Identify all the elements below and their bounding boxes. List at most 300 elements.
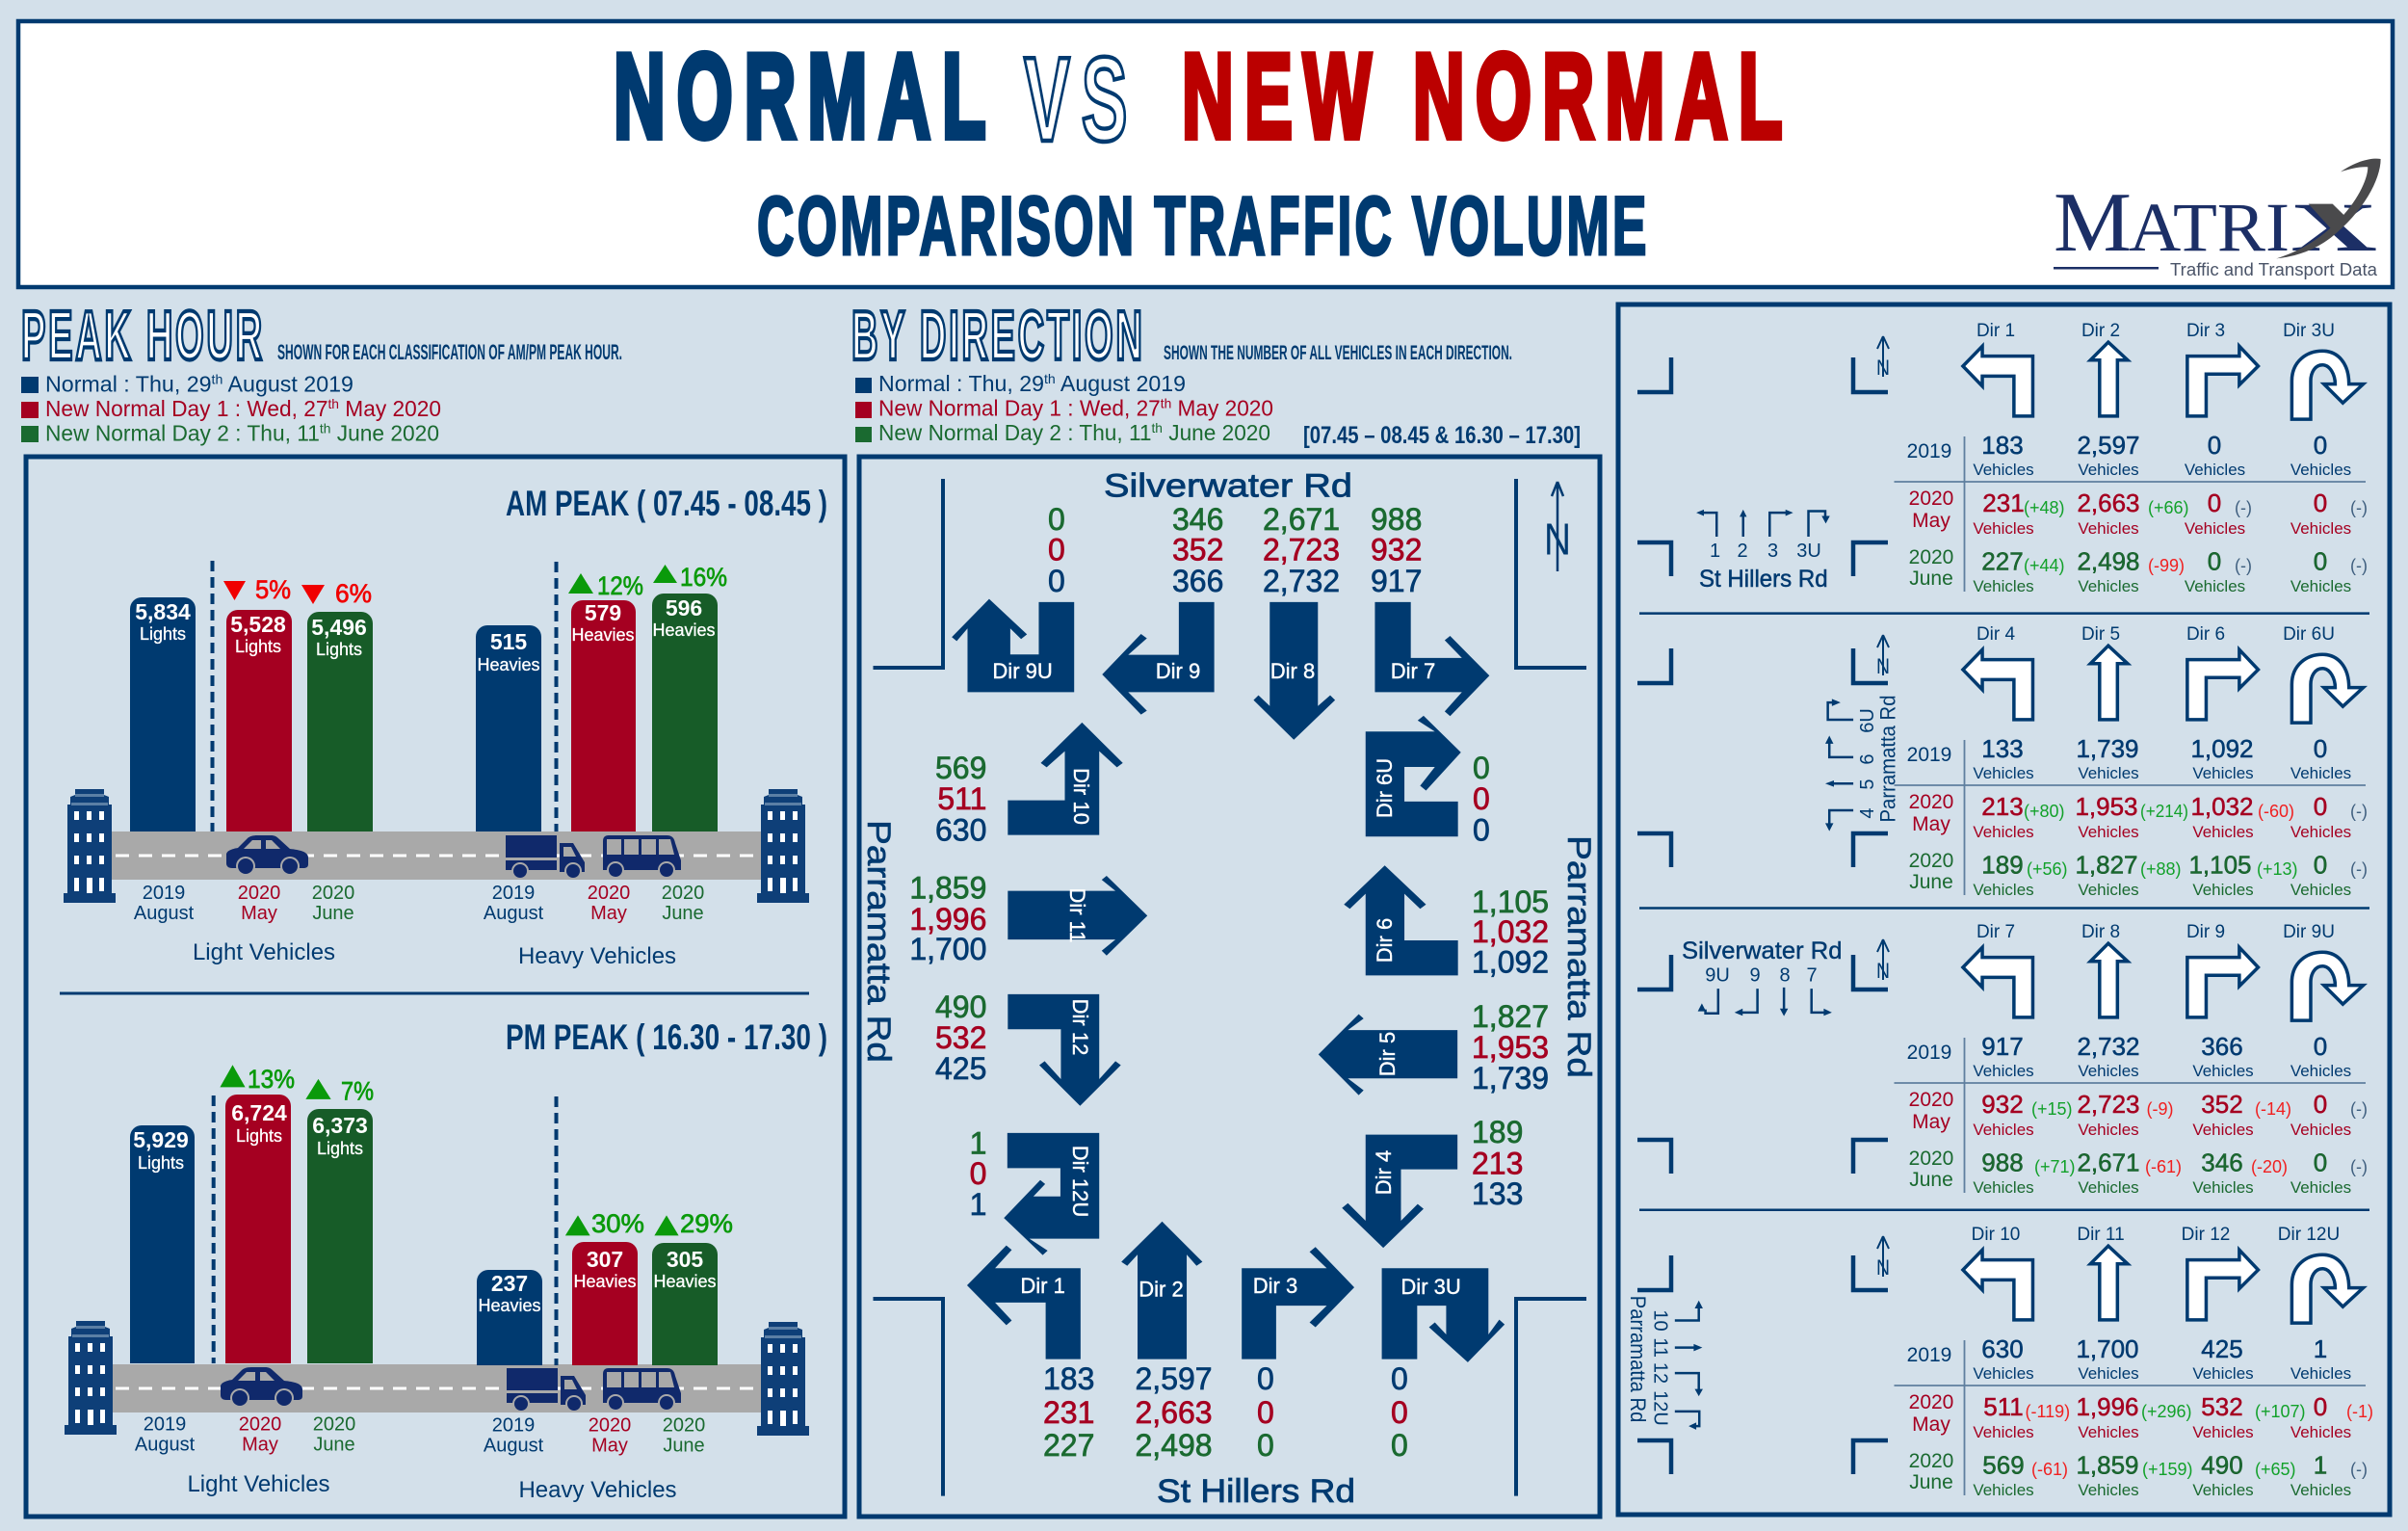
- counts: parramatta rd east: [1472, 751, 1549, 1211]
- table: dir 1 to 3u: 0: [2314, 488, 2327, 517]
- am peak heading: AM PEAK ( 07.45 - 08.45 ): [506, 484, 827, 523]
- legend: peak hour: August 2019: [222, 372, 353, 397]
- table: dir 7 to 9u: June: [1909, 1169, 1953, 1191]
- table: dir 7 to 9u: 2020: [1909, 1089, 1953, 1111]
- axis labels am: May: [241, 903, 277, 924]
- inset map: parramatta rd east: 4: [1857, 807, 1878, 819]
- bar chart: am heavy vehicles: 515: [490, 629, 527, 654]
- percent changes am: 5%: [255, 575, 291, 604]
- counts: silverwater rd: 0: [1048, 502, 1065, 537]
- table: dir 4 to 6u: Vehicles: [1973, 881, 2034, 899]
- table: dir 4 to 6u: Vehicles: [2078, 823, 2139, 841]
- counts: parramatta rd east: 1,739: [1472, 1061, 1549, 1095]
- legend: by direction: June 2020: [1163, 420, 1270, 445]
- table: dir 7 to 9u: Vehicles: [2290, 1062, 2351, 1080]
- bar chart: pm heavy vehicles: Heavies: [573, 1272, 637, 1291]
- dividers pm: [214, 1095, 556, 1365]
- table: dir 10 to 12u: June: [1909, 1471, 1953, 1493]
- axis labels am: [134, 883, 704, 969]
- bar chart: am light vehicles: Lights: [140, 624, 186, 644]
- table: dir 10 to 12u: Vehicles: [2078, 1364, 2139, 1383]
- table: dir 7 to 9u: Vehicles: [2192, 1062, 2254, 1080]
- axis labels pm: 2020: [589, 1414, 631, 1436]
- direction labels on arrows: Dir 2: [1139, 1278, 1184, 1302]
- table: dir 10 to 12u: Vehicles: [2078, 1423, 2139, 1441]
- icon: buildings am: [64, 789, 809, 903]
- table: dir 4 to 6u: 0: [2314, 734, 2327, 763]
- table: dir 1 to 3u: Vehicles: [2290, 519, 2351, 538]
- table: dir 10 to 12u: 2020: [1909, 1391, 1953, 1413]
- table: dir 1 to 3u: (-): [2235, 498, 2252, 517]
- table: dir 10 to 12u: 630: [1981, 1334, 2024, 1363]
- counts: silverwater rd: 346: [1172, 502, 1223, 537]
- table: dir 10 to 12u: (+65): [2255, 1460, 2296, 1479]
- table: dir 1 to 3u: 2,597: [2077, 431, 2140, 460]
- table: dir 4 to 6u: (+80): [2024, 802, 2065, 821]
- legend: by direction: New Normal Day 1 : Wed, 27: [878, 395, 1165, 420]
- inset map: st hillers rd: 3U: [1796, 541, 1821, 562]
- table: dir 10 to 12u: 1: [2314, 1451, 2327, 1480]
- bar chart: pm light vehicles: Lights: [236, 1126, 282, 1146]
- counts: silverwater rd: 917: [1371, 564, 1422, 598]
- bar chart: am heavy vehicles: [476, 594, 718, 831]
- panel: peak hour charts: [26, 457, 845, 1517]
- table: dir 4 to 6u: Vehicles: [2290, 823, 2351, 841]
- table: dir 4 to 6u: Vehicles: [2078, 881, 2139, 899]
- legend: by direction: th: [1151, 420, 1163, 436]
- direction labels on arrows: Dir 12U: [1068, 1146, 1092, 1217]
- table: dir 4 to 6u: (+56): [2027, 859, 2068, 879]
- counts: st hillers rd: 0: [1391, 1428, 1408, 1463]
- icon: vehicles pm: [221, 1367, 681, 1412]
- logo: matrix: ATRI: [2129, 189, 2290, 266]
- bar chart: pm light vehicles: 6,724: [231, 1100, 287, 1125]
- table: dir 10 to 12u: Vehicles: [2078, 1481, 2139, 1499]
- legend: by direction: th: [1161, 395, 1171, 410]
- table: dir 10 to 12u: Dir 10: [1972, 1225, 2020, 1245]
- table: dir 10 to 12u: 532: [2201, 1392, 2243, 1421]
- direction labels on arrows: Dir 8: [1270, 659, 1315, 683]
- axis labels pm: August: [484, 1436, 544, 1457]
- counts: parramatta rd west: 1: [970, 1187, 986, 1222]
- bar chart: pm light vehicles: Lights: [317, 1139, 363, 1158]
- table: dir 7 to 9u: Vehicles: [1973, 1178, 2034, 1197]
- inset map: parramatta rd west: 12: [1650, 1362, 1671, 1384]
- title: normal vs new normal: VS: [1024, 34, 1139, 167]
- axis labels pm: 2019: [492, 1414, 535, 1436]
- section: parramatta rd west directions: [1626, 1225, 2373, 1499]
- table: dir 4 to 6u: (+214): [2140, 802, 2188, 821]
- table: dir 1 to 3u: (-99): [2148, 556, 2185, 575]
- table: dir 7 to 9u: Dir 9U: [2283, 922, 2335, 942]
- table: dir 10 to 12u: 1: [2314, 1334, 2327, 1363]
- percent changes pm: 30%: [591, 1209, 644, 1238]
- direction labels on arrows: Dir 1: [1020, 1274, 1065, 1298]
- panel: intersection diagram: [859, 457, 1600, 1517]
- table: dir 10 to 12u: (+296): [2141, 1402, 2192, 1421]
- percent changes am: 16%: [680, 563, 727, 592]
- axis labels pm: 2019: [144, 1414, 186, 1436]
- table: dir 1 to 3u: 2020: [1909, 546, 1953, 568]
- table: dir 10 to 12u: 0: [2314, 1392, 2327, 1421]
- table: dir 7 to 9u: 932: [1981, 1090, 2024, 1119]
- table: dir 7 to 9u: 2,671: [2077, 1148, 2140, 1177]
- inset map: parramatta rd west: Parramatta Rd: [1626, 1296, 1650, 1422]
- table: dir 4 to 6u: (-): [2350, 859, 2368, 879]
- table: dir 7 to 9u: Dir 8: [2081, 922, 2120, 942]
- table: dir 4 to 6u: (-60): [2258, 802, 2294, 821]
- counts: parramatta rd west: 0: [970, 1156, 986, 1191]
- axis labels pm: Light Vehicles: [187, 1471, 330, 1497]
- counts: parramatta rd east: 189: [1472, 1115, 1523, 1149]
- bar chart: pm heavy vehicles: 305: [667, 1247, 703, 1272]
- icon: buildings pm: [65, 1321, 809, 1436]
- axis labels am: June: [312, 903, 354, 924]
- table: dir 7 to 9u: (+15): [2031, 1099, 2073, 1119]
- table: dir 4 to 6u: Vehicles: [2290, 764, 2351, 782]
- axis labels pm: 2020: [313, 1414, 355, 1436]
- table: dir 4 to 6u: 2019: [1907, 744, 1951, 766]
- counts: parramatta rd east: 0: [1473, 751, 1490, 785]
- table: dir 7 to 9u: (+71): [2034, 1157, 2076, 1176]
- counts: st hillers rd: 0: [1391, 1395, 1408, 1430]
- table: dir 4 to 6u: 1,953: [2075, 792, 2138, 821]
- table: dir 1 to 3u: Dir 3: [2186, 321, 2225, 341]
- table: dir 7 to 9u: Vehicles: [1973, 1121, 2034, 1139]
- road: pm: [112, 1364, 762, 1412]
- inset map: silverwater rd: 8: [1779, 965, 1791, 987]
- road corners: [873, 479, 1586, 1496]
- inset map: parramatta rd east: Parramatta Rd: [1876, 696, 1899, 823]
- axis labels pm: Heavy Vehicles: [518, 1477, 677, 1503]
- table: dir 1 to 3u: 183: [1981, 431, 2024, 460]
- table: dir 10 to 12u: 425: [2201, 1334, 2243, 1363]
- counts: st hillers rd: 183: [1043, 1361, 1094, 1396]
- section: parramatta rd east directions: [1637, 624, 2368, 899]
- percent changes am: 6%: [335, 579, 372, 608]
- direction labels on arrows: Dir 6U: [1373, 758, 1397, 818]
- heading: by direction: BY DIRECTION: [851, 298, 1145, 375]
- table: dir 7 to 9u: Vehicles: [2078, 1121, 2139, 1139]
- counts: silverwater rd: 0: [1048, 533, 1065, 568]
- counts: st hillers rd: [1043, 1361, 1408, 1463]
- counts: st hillers rd: 2,597: [1135, 1361, 1213, 1396]
- table: dir 4 to 6u: 1,105: [2188, 850, 2252, 879]
- table: dir 7 to 9u: 2020: [1909, 1148, 1953, 1170]
- axis labels pm: [135, 1414, 705, 1503]
- table: dir 1 to 3u: Vehicles: [2290, 461, 2351, 479]
- arrows: east west south approaches: [967, 865, 1505, 1362]
- legend: by direction: th: [1044, 371, 1056, 386]
- table: dir 10 to 12u: (+107): [2255, 1402, 2306, 1421]
- table: dir 10 to 12u: Dir 12U: [2278, 1225, 2340, 1245]
- legend: by direction: August 2019: [1056, 371, 1186, 396]
- direction labels on arrows: Dir 3: [1253, 1274, 1297, 1298]
- counts: st hillers rd: 0: [1257, 1361, 1274, 1396]
- counts: parramatta rd west: 532: [935, 1020, 986, 1055]
- counts: st hillers rd: 0: [1257, 1395, 1274, 1430]
- table: dir 7 to 9u: 988: [1981, 1148, 2024, 1177]
- table: dir 4 to 6u: 1,827: [2075, 850, 2138, 879]
- counts: parramatta rd east: 1,092: [1472, 944, 1549, 979]
- table: dir 10 to 12u: 511: [1983, 1392, 2024, 1421]
- road name: parramatta rd west: Parramatta Rd: [860, 820, 897, 1063]
- table: dir 1 to 3u: (-): [2350, 556, 2368, 575]
- table: dir 1 to 3u: 0: [2208, 431, 2221, 460]
- table: dir 7 to 9u: 346: [2201, 1148, 2243, 1177]
- inset map: parramatta rd east: 6U: [1857, 708, 1878, 733]
- table: dir 7 to 9u: [1894, 922, 2368, 1197]
- table: dir 7 to 9u: 2,732: [2077, 1032, 2140, 1061]
- legend: by direction: [07.45 – 08.45 & 16.30 – 17.30]: [1303, 422, 1581, 449]
- counts: st hillers rd: 2,663: [1135, 1395, 1213, 1430]
- road name: st hillers rd: St Hillers Rd: [1157, 1473, 1355, 1510]
- table: dir 1 to 3u: May: [1912, 510, 1950, 532]
- table: dir 7 to 9u: Vehicles: [2290, 1178, 2351, 1197]
- direction labels on arrows: Dir 10: [1069, 768, 1093, 825]
- counts: parramatta rd east: 1,827: [1472, 999, 1549, 1034]
- legend: peak hour: th: [320, 420, 330, 436]
- axis labels pm: May: [591, 1436, 628, 1457]
- table: dir 1 to 3u: 0: [2314, 431, 2327, 460]
- title: normal vs new normal: NEW NORMAL: [1182, 29, 1793, 163]
- table: dir 7 to 9u: Dir 9: [2186, 922, 2225, 942]
- table: dir 10 to 12u: 2020: [1909, 1450, 1953, 1472]
- table: dir 4 to 6u: Vehicles: [2290, 881, 2351, 899]
- counts: parramatta rd west: [909, 751, 986, 1222]
- counts: silverwater rd: 2,671: [1263, 502, 1340, 537]
- table: dir 7 to 9u: (-9): [2146, 1099, 2173, 1119]
- table: dir 7 to 9u: (-): [2350, 1099, 2368, 1119]
- logo: matrix: X: [2290, 189, 2377, 266]
- legend: peak hour: Normal : Thu, 29: [45, 372, 210, 397]
- section: silverwater rd directions: [1637, 922, 2368, 1197]
- axis labels am: 2020: [662, 883, 704, 904]
- table: dir 4 to 6u: Vehicles: [2192, 881, 2254, 899]
- counts: silverwater rd: 366: [1172, 564, 1223, 598]
- counts: silverwater rd: 0: [1048, 564, 1065, 598]
- bar chart: am heavy vehicles: Heavies: [477, 655, 540, 674]
- heading: peak hour: SHOWN FOR EACH CLASSIFICATION OF AM/PM PEAK HOUR.: [277, 340, 622, 364]
- table: dir 1 to 3u: Dir 1: [1976, 321, 2015, 341]
- legend: peak hour: New Normal Day 2 : Thu, 11: [45, 420, 323, 445]
- table: dir 1 to 3u: 2019: [1907, 440, 1951, 462]
- title: normal vs new normal: NORMAL: [614, 29, 997, 163]
- counts: silverwater rd: [1048, 502, 1422, 598]
- table: dir 7 to 9u: 2019: [1907, 1042, 1951, 1064]
- axis labels pm: 2020: [239, 1414, 281, 1436]
- table: dir 10 to 12u: 1,700: [2076, 1334, 2139, 1363]
- table: dir 7 to 9u: 2,723: [2077, 1090, 2140, 1119]
- table: dir 7 to 9u: (-14): [2255, 1099, 2291, 1119]
- counts: parramatta rd west: 1,996: [909, 902, 986, 937]
- table: dir 10 to 12u: Dir 11: [2077, 1225, 2125, 1245]
- table: dir 4 to 6u: 133: [1981, 734, 2024, 763]
- table: dir 1 to 3u: Dir 2: [2081, 321, 2120, 341]
- icon: vehicles am: [226, 835, 681, 880]
- table: dir 4 to 6u: Vehicles: [2078, 764, 2139, 782]
- panel: direction tables: [1618, 304, 2390, 1515]
- inset map: silverwater rd: 9: [1749, 965, 1761, 987]
- legend: by direction: New Normal Day 2 : Thu, 11: [878, 420, 1156, 445]
- axis labels am: 2019: [143, 883, 185, 904]
- table: dir 4 to 6u: Dir 6U: [2283, 624, 2335, 645]
- table: dir 1 to 3u: (-): [2235, 556, 2252, 575]
- bar chart: am light vehicles: Lights: [316, 640, 362, 659]
- heading: by direction: [851, 298, 1512, 375]
- table: dir 10 to 12u: May: [1912, 1413, 1950, 1436]
- table: dir 1 to 3u: 2,663: [2077, 488, 2140, 517]
- table: dir 4 to 6u: 2020: [1909, 850, 1953, 872]
- table: dir 4 to 6u: May: [1912, 813, 1950, 835]
- table: dir 1 to 3u: Vehicles: [2185, 461, 2245, 479]
- counts: parramatta rd west: 511: [937, 781, 986, 816]
- table: dir 1 to 3u: (+66): [2148, 498, 2189, 517]
- table: dir 4 to 6u: Dir 4: [1976, 624, 2015, 645]
- table: dir 7 to 9u: Vehicles: [2078, 1178, 2139, 1197]
- bar chart: pm light vehicles: Lights: [138, 1153, 184, 1173]
- counts: silverwater rd: 988: [1371, 502, 1422, 537]
- table: dir 10 to 12u: Vehicles: [1973, 1423, 2034, 1441]
- table: dir 4 to 6u: 1,092: [2190, 734, 2254, 763]
- axis labels am: 2020: [312, 883, 354, 904]
- table: dir 10 to 12u: Vehicles: [2290, 1423, 2351, 1441]
- table: dir 1 to 3u: 2020: [1909, 488, 1953, 510]
- table: dir 7 to 9u: Vehicles: [1973, 1062, 2034, 1080]
- table: dir 1 to 3u: 0: [2208, 547, 2221, 576]
- bar chart: am heavy vehicles: 596: [666, 595, 702, 620]
- table: dir 4 to 6u: June: [1909, 871, 1953, 893]
- legend: by direction: Normal : Thu, 29: [878, 371, 1043, 396]
- table: dir 10 to 12u: 2019: [1907, 1344, 1951, 1366]
- dividers am: [212, 561, 557, 831]
- legend: peak hour: th: [212, 372, 222, 387]
- table: dir 4 to 6u: (-): [2350, 802, 2368, 821]
- axis labels am: Light Vehicles: [193, 939, 335, 965]
- table: dir 1 to 3u: June: [1909, 568, 1953, 590]
- legend: peak hour: May 2020: [339, 396, 441, 421]
- heading: peak hour: PEAK HOUR: [21, 298, 265, 375]
- table: dir 4 to 6u: Dir 6: [2186, 624, 2225, 645]
- table: dir 4 to 6u: Vehicles: [2192, 764, 2254, 782]
- table: dir 10 to 12u: (-1): [2346, 1402, 2373, 1421]
- table: dir 10 to 12u: Vehicles: [1973, 1481, 2034, 1499]
- percent changes am: 12%: [597, 571, 643, 600]
- counts: parramatta rd east: 1,032: [1472, 914, 1549, 949]
- bar chart: am light vehicles: Lights: [235, 637, 281, 656]
- table: dir 7 to 9u: 0: [2314, 1148, 2327, 1177]
- table: dir 10 to 12u: Dir 12: [2182, 1225, 2230, 1245]
- table: dir 7 to 9u: 366: [2201, 1032, 2243, 1061]
- direction labels on arrows: Dir 7: [1391, 659, 1435, 683]
- counts: parramatta rd east: 1,105: [1472, 884, 1549, 919]
- bar chart: am light vehicles: 5,528: [230, 612, 286, 637]
- subtitle: comparison traffic volume: COMPARISON TRAFFIC VOLUME: [757, 180, 1650, 273]
- counts: silverwater rd: 932: [1371, 533, 1422, 568]
- table: dir 7 to 9u: Vehicles: [2290, 1121, 2351, 1139]
- axis labels am: June: [662, 903, 704, 924]
- legend: peak hour: th: [327, 396, 339, 411]
- table: dir 7 to 9u: Dir 7: [1976, 922, 2015, 942]
- table: dir 1 to 3u: Vehicles: [1973, 519, 2034, 538]
- counts: parramatta rd west: 1: [970, 1125, 986, 1160]
- inset map: parramatta rd west: [1626, 1236, 1890, 1474]
- road name: parramatta rd east: Parramatta Rd: [1560, 835, 1597, 1078]
- table: dir 7 to 9u: (-20): [2251, 1157, 2288, 1176]
- bar chart: pm heavy vehicles: 237: [491, 1271, 528, 1296]
- bar chart: am heavy vehicles: 579: [585, 600, 621, 625]
- table: dir 1 to 3u: Vehicles: [2078, 461, 2139, 479]
- table: dir 1 to 3u: (+48): [2024, 498, 2065, 517]
- axis labels am: 2019: [492, 883, 535, 904]
- axis labels pm: 2020: [663, 1414, 705, 1436]
- inset map: silverwater rd: 9U: [1705, 965, 1730, 987]
- counts: parramatta rd east: 1,953: [1472, 1030, 1549, 1065]
- table: dir 1 to 3u: Vehicles: [2185, 519, 2245, 538]
- table: dir 1 to 3u: 231: [1982, 488, 2025, 517]
- legend: by direction: May 2020: [1171, 395, 1273, 420]
- counts: st hillers rd: 231: [1043, 1395, 1094, 1430]
- counts: st hillers rd: 0: [1257, 1428, 1274, 1463]
- road name: silverwater rd: Silverwater Rd: [1104, 468, 1352, 505]
- table: dir 4 to 6u: Vehicles: [2192, 823, 2254, 841]
- axis labels am: 2020: [588, 883, 630, 904]
- axis labels am: 2020: [238, 883, 280, 904]
- counts: parramatta rd west: 425: [935, 1051, 986, 1086]
- table: dir 4 to 6u: (+88): [2140, 859, 2182, 879]
- inset map: silverwater rd: Silverwater Rd: [1682, 937, 1842, 964]
- table: dir 1 to 3u: Vehicles: [2290, 577, 2351, 595]
- axis labels pm: May: [242, 1434, 278, 1455]
- counts: parramatta rd east: 213: [1472, 1147, 1523, 1181]
- legend: peak hour: June 2020: [330, 420, 439, 445]
- inset map: st hillers rd: 2: [1737, 541, 1748, 562]
- bar chart: am heavy vehicles: Heavies: [571, 625, 635, 645]
- logo: matrix: M: [2054, 176, 2132, 270]
- table: dir 10 to 12u: (-): [2350, 1460, 2368, 1479]
- table: dir 10 to 12u: Vehicles: [2290, 1364, 2351, 1383]
- heading: peak hour: [21, 298, 622, 375]
- axis labels am: August: [134, 903, 195, 924]
- percent changes pm: 13%: [248, 1065, 295, 1094]
- direction labels on arrows: Dir 9U: [992, 659, 1053, 683]
- table: dir 7 to 9u: (-): [2350, 1157, 2368, 1176]
- table: dir 10 to 12u: Vehicles: [2192, 1364, 2254, 1383]
- pm peak heading: PM PEAK ( 16.30 - 17.30 ): [506, 1017, 827, 1057]
- legend: peak hour: [21, 372, 441, 445]
- table: dir 1 to 3u: [1894, 321, 2368, 595]
- table: dir 4 to 6u: Dir 5: [2081, 624, 2120, 645]
- percent changes pm: 29%: [680, 1209, 733, 1238]
- table: dir 7 to 9u: 0: [2314, 1090, 2327, 1119]
- bar chart: am light vehicles: 5,834: [135, 599, 191, 624]
- table: dir 4 to 6u: 1,032: [2190, 792, 2254, 821]
- direction labels on arrows: Dir 9: [1156, 659, 1200, 683]
- table: dir 1 to 3u: Vehicles: [2185, 577, 2245, 595]
- table: dir 10 to 12u: (+159): [2142, 1460, 2193, 1479]
- table: dir 1 to 3u: Vehicles: [2078, 577, 2139, 595]
- section: st hillers rd directions: [1637, 321, 2368, 595]
- bar chart: pm heavy vehicles: [477, 1242, 718, 1365]
- counts: st hillers rd: 2,498: [1135, 1428, 1213, 1463]
- bar chart: am light vehicles: [130, 597, 373, 831]
- bar chart: am heavy vehicles: Heavies: [652, 620, 716, 640]
- inset map: parramatta rd east: [1637, 635, 1899, 867]
- table: dir 10 to 12u: Vehicles: [2290, 1481, 2351, 1499]
- table: dir 1 to 3u: 0: [2208, 488, 2221, 517]
- axis labels pm: August: [135, 1434, 196, 1455]
- percent changes pm: [221, 1065, 733, 1238]
